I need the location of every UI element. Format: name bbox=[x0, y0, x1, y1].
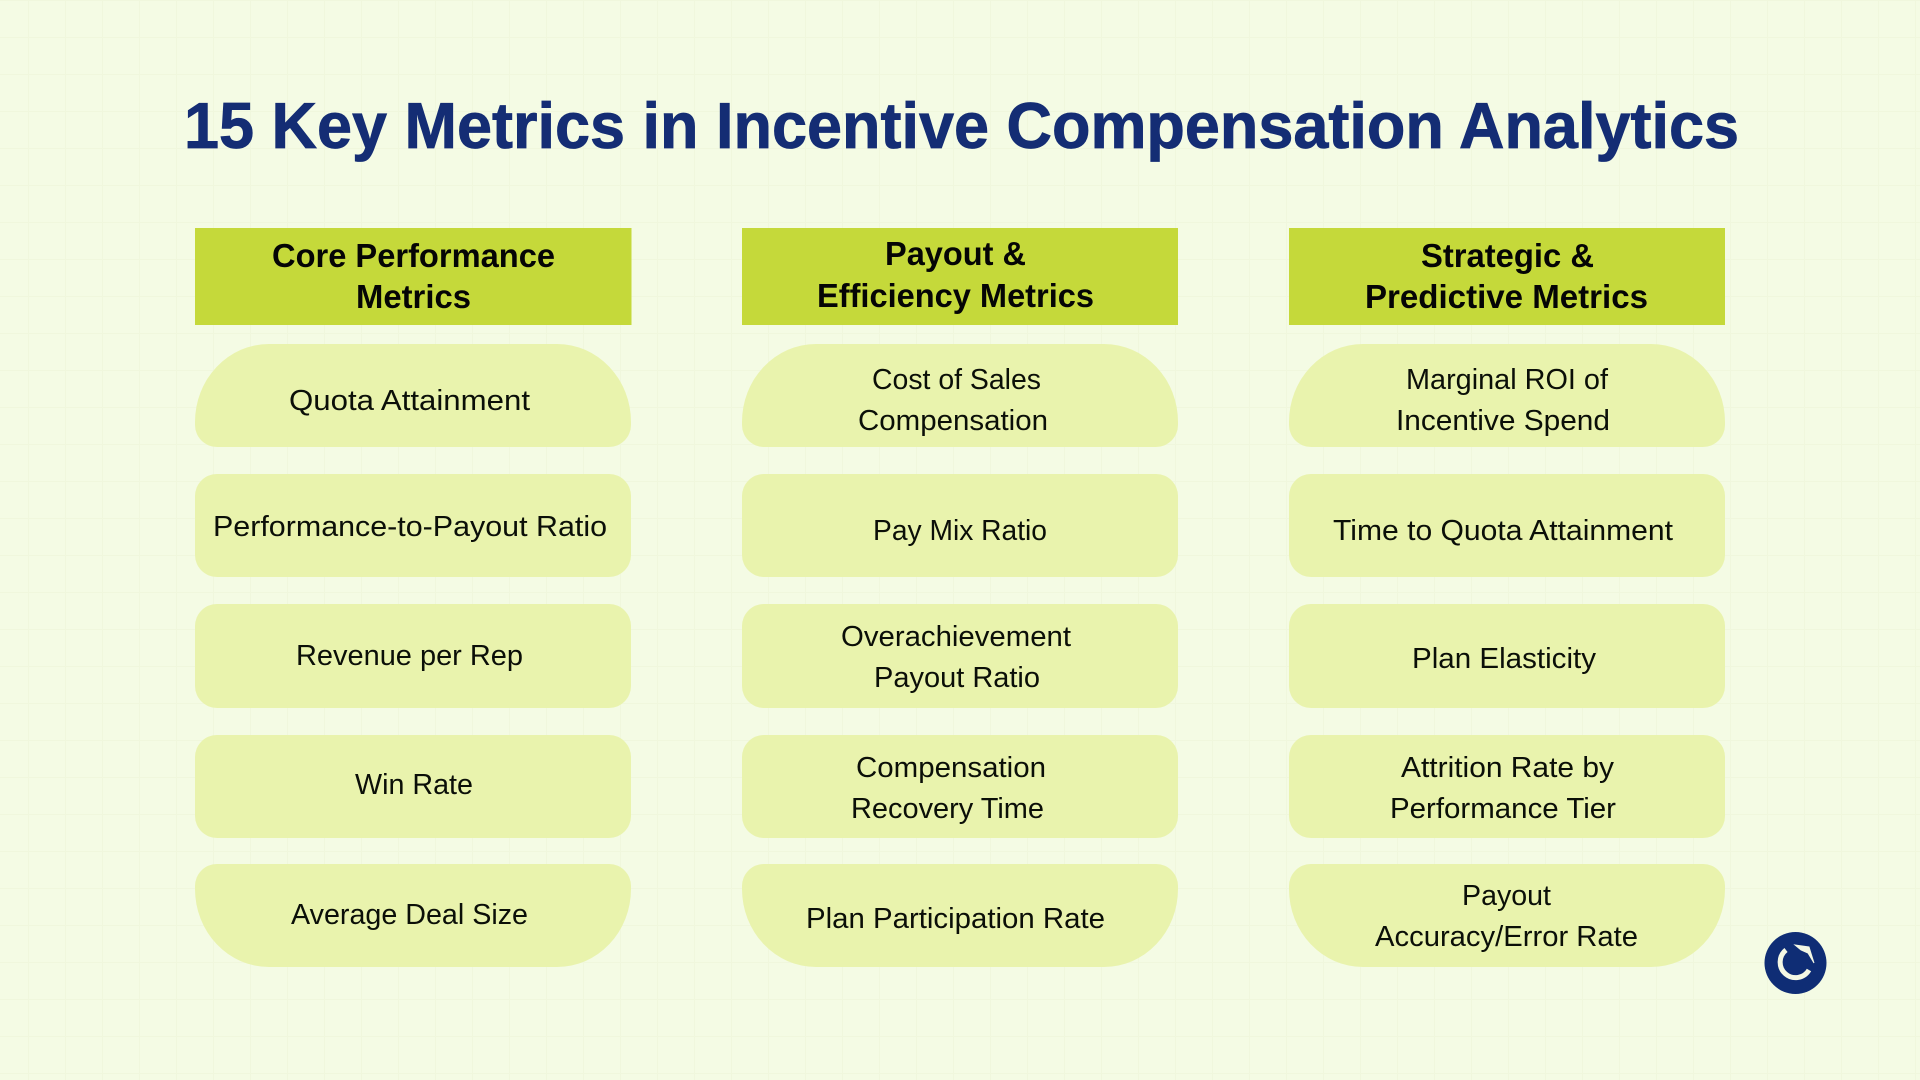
metric card: compensation recovery time: Compensation bbox=[856, 752, 1046, 784]
column heading: strategic and predictive metrics bbox=[1289, 228, 1725, 325]
metric card: payout accuracy/error rate bbox=[1289, 864, 1725, 967]
metric card: attrition rate by performance tier bbox=[1289, 735, 1725, 838]
metric card: cost of sales compensation bbox=[742, 344, 1178, 447]
column heading: strategic and predictive metrics: Predictive Metrics bbox=[1365, 278, 1648, 315]
metric card: cost of sales compensation: Cost of Sales bbox=[872, 364, 1041, 396]
metric card: cost of sales compensation: Compensation bbox=[858, 405, 1048, 437]
title: 15 Key Metrics in Incentive Compensation Analytics bbox=[184, 89, 1739, 162]
metric card: payout accuracy/error rate: Accuracy/Error Rate bbox=[1375, 921, 1638, 953]
metric card: revenue per rep bbox=[195, 604, 631, 708]
column heading: core performance metrics: Core Performance bbox=[272, 237, 555, 274]
metric card: pay mix ratio bbox=[742, 474, 1178, 577]
column heading: strategic and predictive metrics: Strategic & bbox=[1421, 237, 1594, 274]
column heading: core performance metrics: Metrics bbox=[356, 278, 471, 315]
metric card: marginal roi of incentive spend: Incentive Spend bbox=[1396, 405, 1610, 437]
metric card: marginal roi of incentive spend: Marginal ROI of bbox=[1406, 364, 1609, 396]
metric card: overachievement payout ratio bbox=[742, 604, 1178, 708]
metric card: performance-to-payout ratio bbox=[195, 474, 631, 577]
column heading: payout and efficiency metrics: Payout & bbox=[885, 235, 1026, 272]
metric card: compensation recovery time: Recovery Time bbox=[851, 793, 1044, 825]
metric card: time to quota attainment: Time to Quota Attainment bbox=[1333, 515, 1673, 547]
metric card: attrition rate by performance tier: Attrition Rate by bbox=[1401, 752, 1615, 784]
metric card: quota attainment bbox=[195, 344, 631, 447]
panel: strategic and predictive metrics bbox=[1289, 228, 1725, 967]
metric card: pay mix ratio: Pay Mix Ratio bbox=[873, 515, 1047, 547]
metric card: time to quota attainment bbox=[1289, 474, 1725, 577]
metric card: overachievement payout ratio: Payout Ratio bbox=[874, 662, 1040, 694]
metric card: payout accuracy/error rate: Payout bbox=[1462, 880, 1551, 912]
metric card: performance-to-payout ratio: Performance-to-Payout Ratio bbox=[213, 511, 607, 543]
metric card: overachievement payout ratio: Overachievement bbox=[841, 621, 1071, 653]
metric card: win rate: Win Rate bbox=[355, 769, 473, 801]
metric card: win rate bbox=[195, 735, 631, 838]
metric card: average deal size bbox=[195, 864, 631, 967]
metric card: revenue per rep: Revenue per Rep bbox=[296, 640, 523, 672]
panel: core performance metrics bbox=[195, 228, 632, 967]
icon: circular arrow logo bbox=[1764, 932, 1826, 994]
metric card: compensation recovery time bbox=[742, 735, 1178, 838]
column heading: payout and efficiency metrics: Efficiency Metrics bbox=[817, 277, 1094, 314]
metric card: plan participation rate: Plan Participation Rate bbox=[806, 903, 1105, 935]
panel: payout and efficiency metrics bbox=[742, 228, 1178, 967]
metric card: quota attainment: Quota Attainment bbox=[289, 385, 530, 417]
metric card: average deal size: Average Deal Size bbox=[291, 899, 528, 931]
metric card: plan elasticity bbox=[1289, 604, 1725, 708]
column heading: payout and efficiency metrics bbox=[742, 228, 1178, 325]
column heading: core performance metrics bbox=[195, 228, 632, 325]
metric card: attrition rate by performance tier: Performance Tier bbox=[1390, 793, 1616, 825]
metric card: marginal roi of incentive spend bbox=[1289, 344, 1725, 447]
metric card: plan elasticity: Plan Elasticity bbox=[1412, 643, 1597, 675]
metric card: plan participation rate bbox=[742, 864, 1178, 967]
